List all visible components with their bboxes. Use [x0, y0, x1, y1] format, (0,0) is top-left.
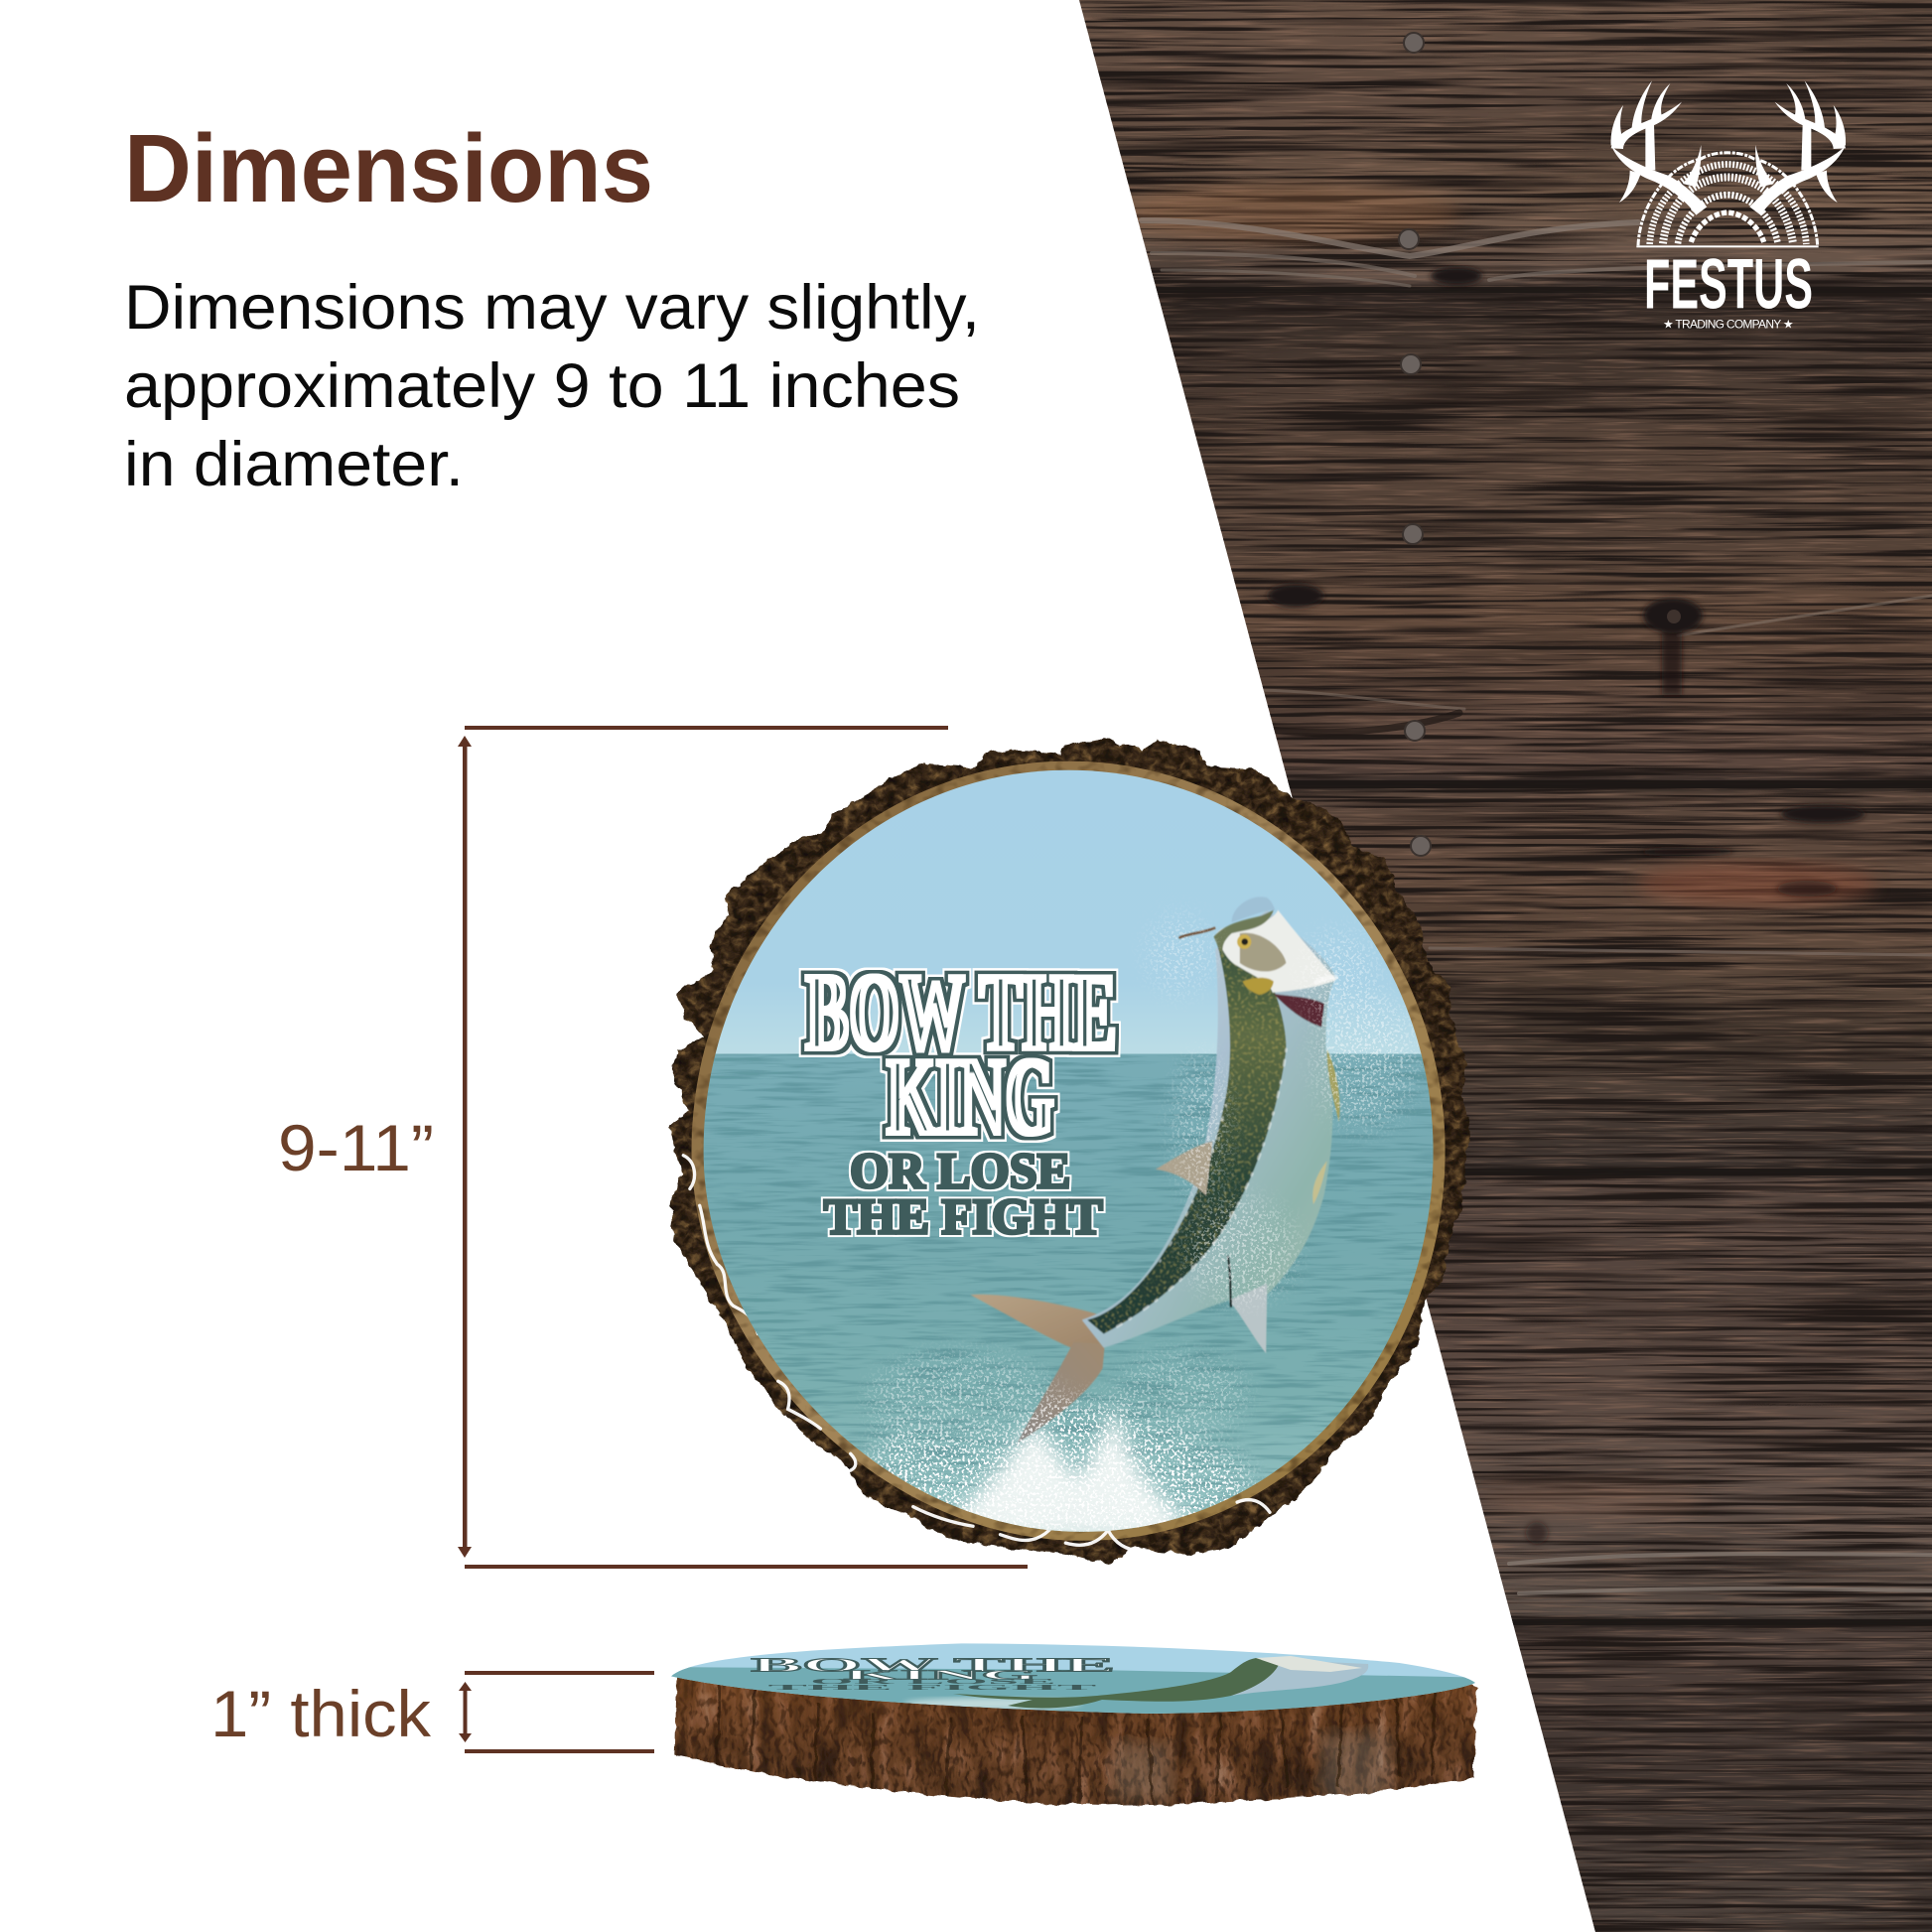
dimension: 1 inch thick with arrow: 1” thick: [210, 1677, 432, 1750]
splash: [918, 1407, 1212, 1540]
dimension: height 9-11 inches with arrow: 9-11”: [278, 1111, 434, 1184]
upper jaw: [1232, 897, 1275, 922]
slogan: bow the king: BOW THE: [805, 951, 1117, 1074]
right fins: [1327, 1049, 1339, 1122]
text block: dimensions description: [124, 273, 980, 499]
slogan: or lose the fight: [824, 1143, 1103, 1245]
knots: [1268, 267, 1864, 1544]
dark back: [1087, 938, 1286, 1333]
anal fin: [1229, 1284, 1267, 1353]
water spray: [690, 759, 1452, 1540]
lure line: [1178, 928, 1215, 938]
icon: left antler: [1611, 80, 1707, 215]
dimension: 1 inch thick with arrow: [210, 1671, 654, 1753]
grain highlights: [1142, 220, 1932, 1593]
bark edge: [657, 726, 1485, 1580]
photo: tarpon leaping from sea: [690, 759, 1452, 1540]
belly silver: [1082, 910, 1335, 1353]
logo: Festus Trading Company: [1611, 80, 1846, 332]
logo wordmark: FESTUS: [1644, 245, 1813, 325]
panel: dark wood plank background: [1072, 0, 1932, 1932]
flattened tarpon: [953, 1656, 1368, 1708]
sea: [690, 1054, 1452, 1539]
sky: [690, 765, 1452, 1055]
dimension: height 9-11 inches with arrow: [278, 726, 1028, 1569]
text block: dimensions description: Dimensions may vary slightly,: [124, 273, 980, 343]
text block: dimensions description: approximately 9 to 11 inches: [124, 351, 960, 421]
slogan: bow the king: KING: [887, 1035, 1054, 1159]
icon: right antler: [1749, 80, 1846, 215]
gold gill plate: [1243, 978, 1274, 995]
logo tagline: ★ TRADING COMPANY ★: [1663, 318, 1794, 332]
flattened slogan: BOW THE: [752, 1654, 1115, 1676]
slogan: or lose the fight: THE FIGHT: [824, 1188, 1103, 1245]
bark side: [655, 1658, 1489, 1817]
tail fin: [970, 1295, 1109, 1351]
shiny white bark highlights: [683, 1156, 1270, 1552]
painted top surface: [655, 1638, 1499, 1727]
flattened slogan: OR LOSE: [810, 1678, 1056, 1686]
flattened slogan: [752, 1654, 1115, 1692]
wood slice front view: [657, 726, 1485, 1580]
sapwood ring: [679, 749, 1457, 1557]
tarpon: [970, 897, 1339, 1443]
red gills: [1274, 994, 1324, 1028]
slogan: bow the king: [805, 951, 1117, 1159]
head: [1215, 910, 1336, 993]
plank seams: [1072, 287, 1932, 1625]
warm patches: [1638, 862, 1876, 905]
heading: Dimensions: Dimensions: [124, 114, 653, 222]
text block: dimensions description: in diameter.: [124, 430, 464, 499]
icon: tree ring half circle: [1638, 153, 1818, 245]
wood slice side view: [655, 1638, 1499, 1817]
eye: [1237, 934, 1251, 949]
pectoral fin: [1156, 1142, 1212, 1195]
flattened slogan: THE FIGHT: [768, 1684, 1099, 1692]
flattened slogan: KING: [844, 1667, 1037, 1682]
screws: [1399, 33, 1431, 856]
water streaks on body: [1104, 977, 1336, 1333]
slogan: or lose the fight: OR LOSE: [850, 1143, 1070, 1198]
